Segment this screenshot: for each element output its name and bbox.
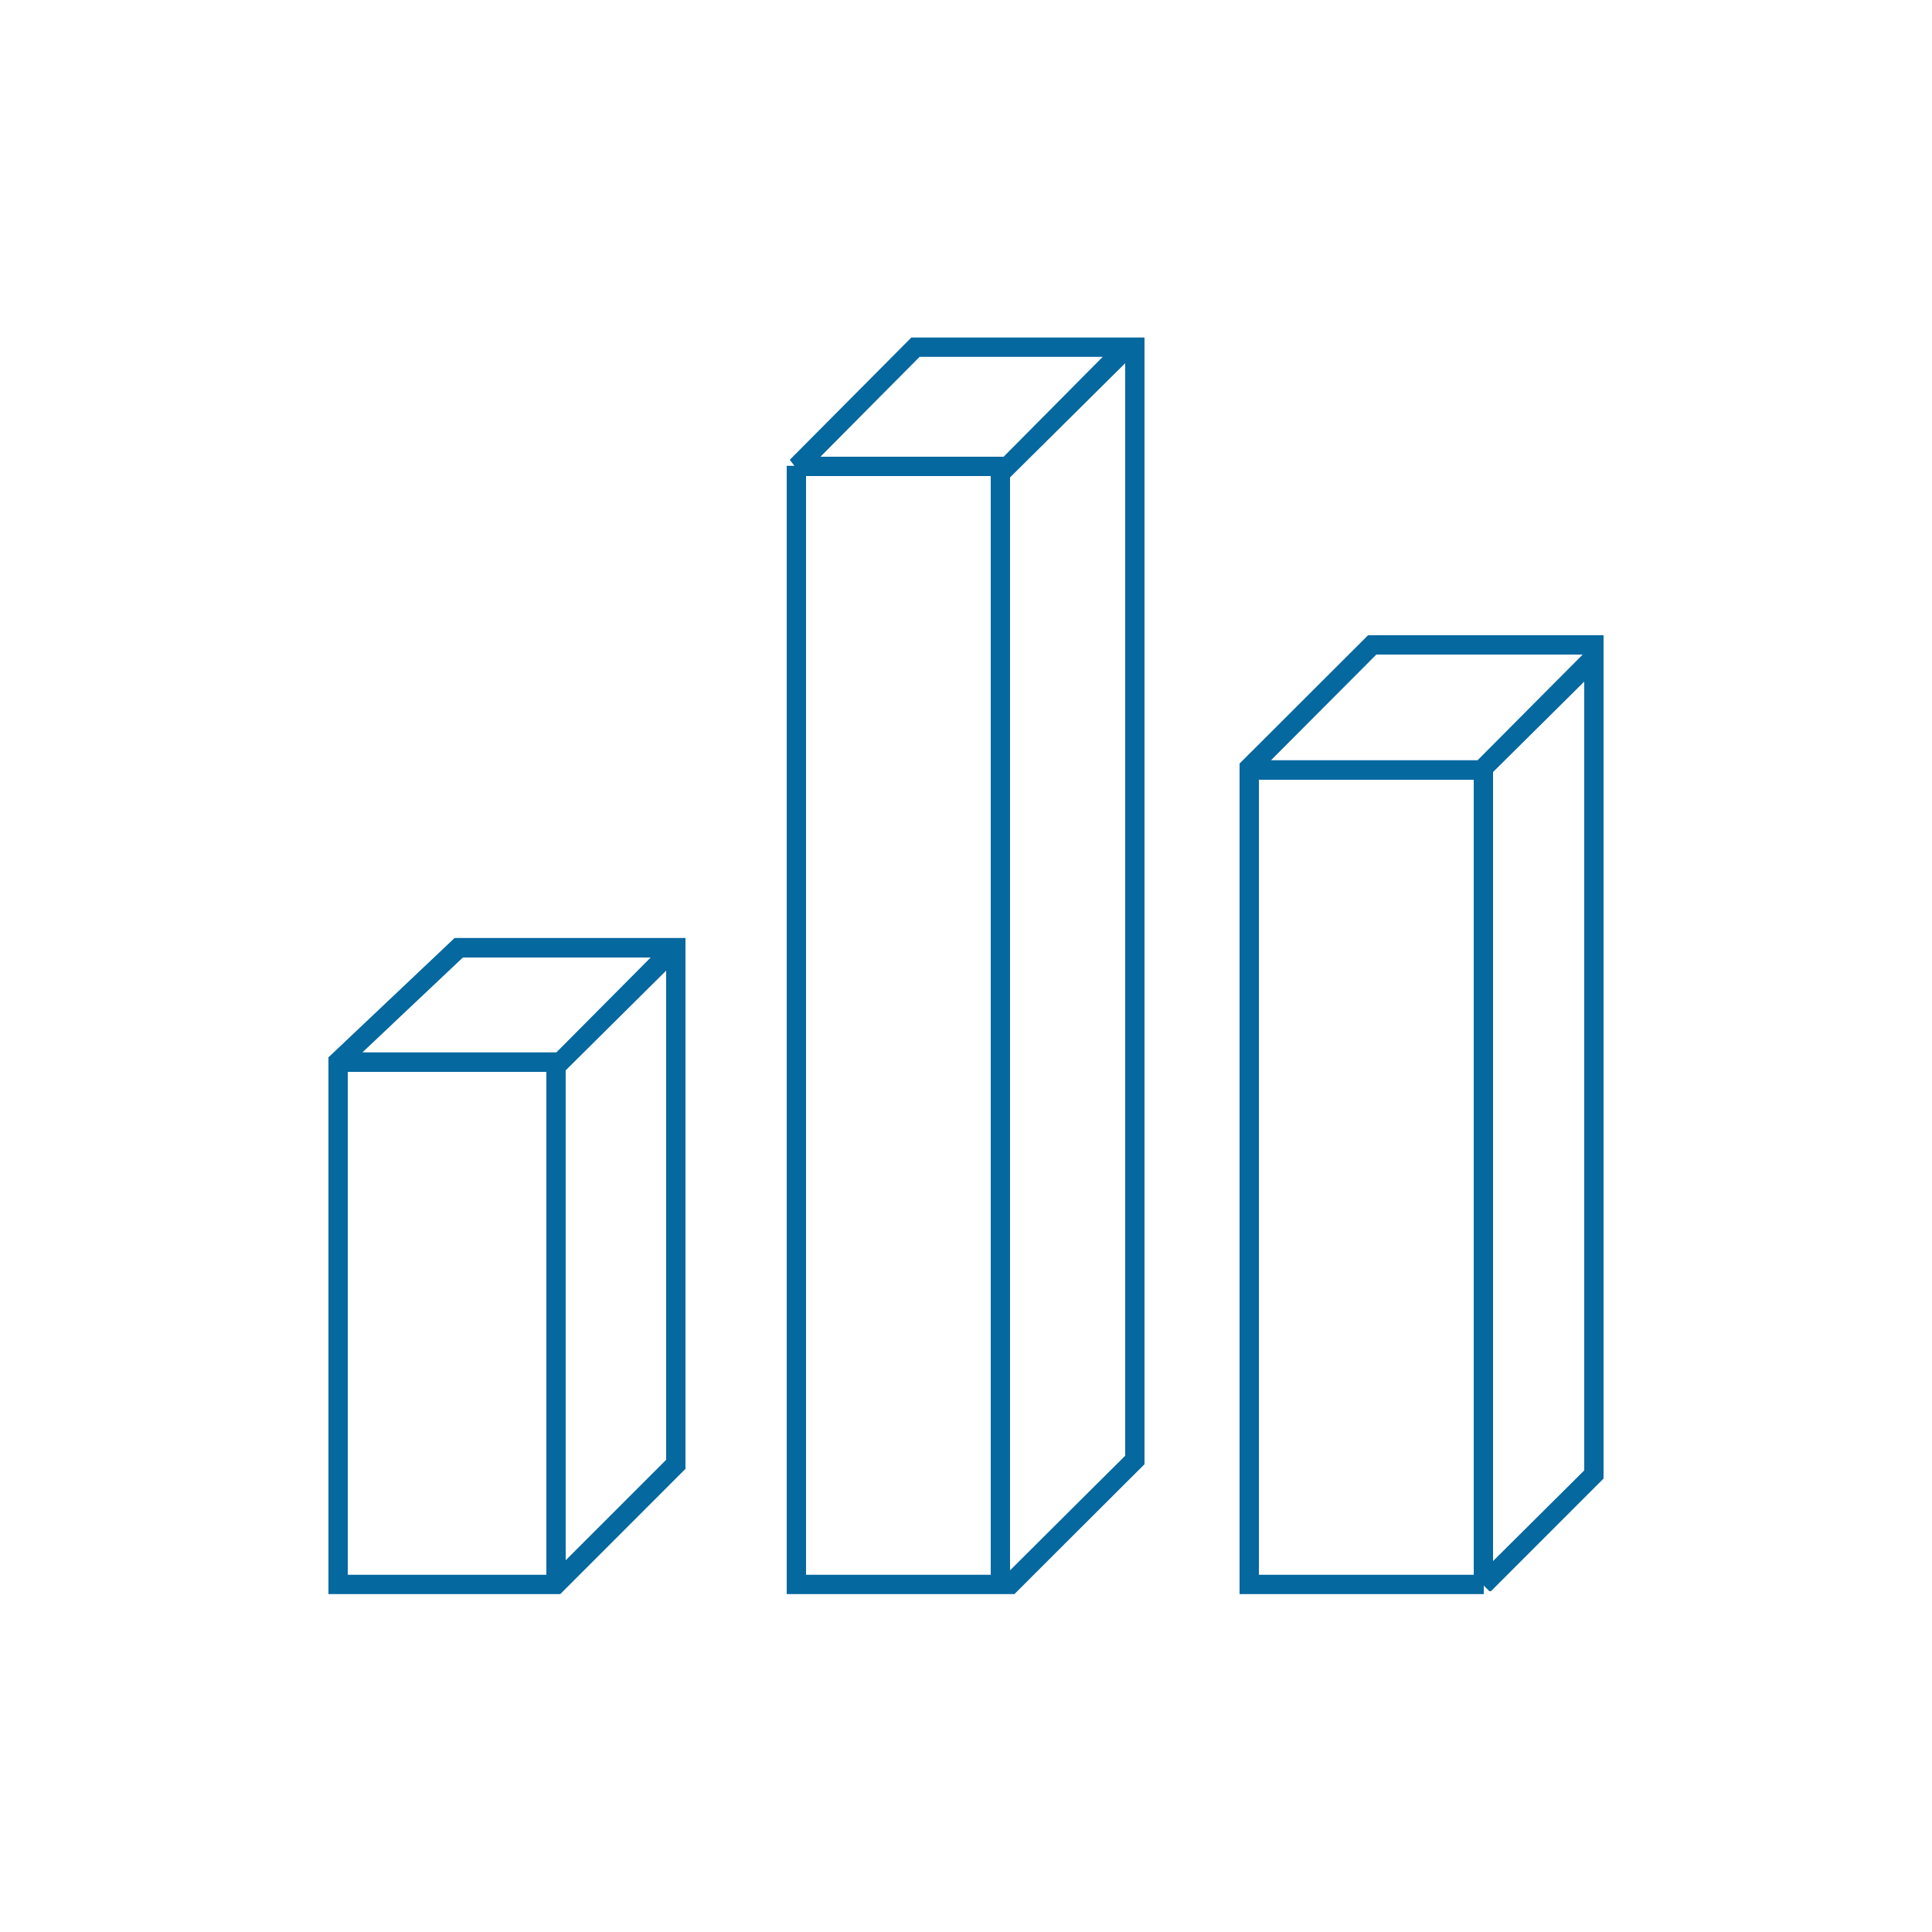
right bar (medium) bbox=[1240, 635, 1604, 1594]
left bar (short) bbox=[328, 938, 685, 1594]
chart: 3D bars bbox=[328, 338, 1604, 1594]
middle bar (tall) bbox=[787, 338, 1145, 1594]
